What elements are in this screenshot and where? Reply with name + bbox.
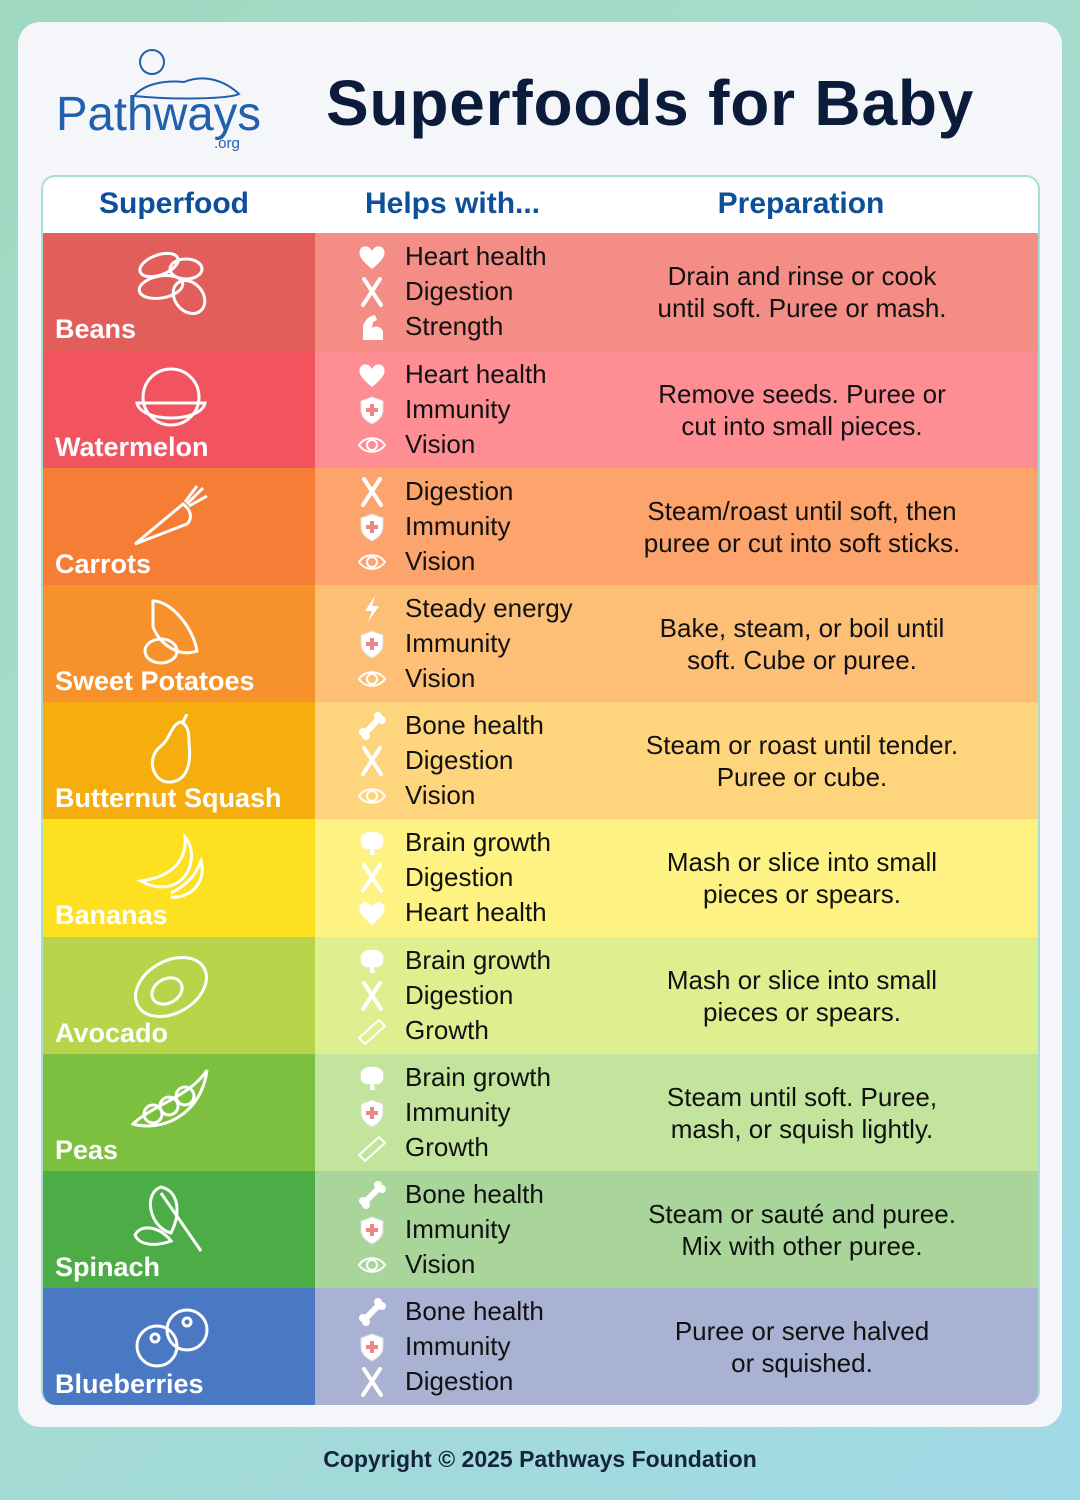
row: Beans: Strength [405,311,503,341]
row: Spinach: Steam or sauté and puree. [648,1199,956,1229]
row: Avocado: Mash or slice into small [667,965,937,995]
row: Butternut Squash: Puree or cube. [717,762,887,792]
header row [99,187,884,220]
row: Beans: until soft. Puree or mash. [657,293,947,323]
row: Peas: Brain growth [405,1062,551,1092]
row: Blueberries: Bone health [405,1296,544,1326]
logo: Pathways.org: Pathways [56,88,261,141]
row: Spinach: Mix with other puree. [681,1231,923,1261]
row: Sweet Potatoes: Immunity [405,628,510,658]
row: Butternut Squash: Butternut Squash [55,783,282,813]
row: Sweet Potatoes [43,585,1038,702]
row: Watermelon: Heart health [405,359,547,389]
row: Avocado: Avocado [55,1018,168,1048]
row: Watermelon: cut into small pieces. [681,411,923,441]
row: Spinach: Spinach [55,1252,160,1282]
row: Blueberries [43,1288,1038,1405]
header row: Helps with... [365,187,540,220]
row: Watermelon: Vision [405,429,475,459]
row: Blueberries: Immunity [405,1331,510,1361]
logo: Pathways.org: .org [214,135,240,152]
logo: Pathways.org [56,49,261,152]
row: Beans: Drain and rinse or cook [668,261,936,291]
row: Watermelon: Watermelon [55,432,209,462]
row: Bananas [43,819,1038,937]
row: Blueberries: Blueberries [55,1369,204,1399]
row: Watermelon: Immunity [405,394,510,424]
row: Avocado [43,937,1038,1054]
row: Bananas: Brain growth [405,827,551,857]
row: Beans: Digestion [405,276,513,306]
footer copyright: Copyright © 2025 Pathways Foundation [323,1446,757,1472]
row: Watermelon [43,351,1038,468]
row: Beans [43,233,1038,351]
row: Peas: Peas [55,1135,118,1165]
row: Bananas: Mash or slice into small [667,847,937,877]
row: Spinach: Immunity [405,1214,510,1244]
row: Sweet Potatoes: soft. Cube or puree. [687,645,917,675]
row: Peas: mash, or squish lightly. [671,1114,933,1144]
row: Avocado: pieces or spears. [703,997,901,1027]
row: Butternut Squash: Bone health [405,710,544,740]
row: Watermelon: Remove seeds. Puree or [658,379,946,409]
row: Butternut Squash: Digestion [405,745,513,775]
row: Carrots: Steam/roast until soft, then [647,496,957,526]
row: Spinach: Vision [405,1249,475,1279]
row: Beans: Beans [55,314,136,344]
row: Blueberries: Puree or serve halved [675,1316,929,1346]
row: Peas: Steam until soft. Puree, [667,1082,937,1112]
row: Peas [43,1054,1038,1171]
header row: Preparation [718,187,884,220]
row: Avocado: Growth [405,1015,489,1045]
row: Blueberries: Digestion [405,1366,513,1396]
row: Butternut Squash: Steam or roast until tender. [646,730,958,760]
row: Sweet Potatoes: Bake, steam, or boil until [660,613,944,643]
row: Carrots: puree or cut into soft sticks. [644,528,960,558]
row: Avocado: Brain growth [405,945,551,975]
row: Carrots: Carrots [55,549,151,579]
row: Peas: Growth [405,1132,489,1162]
row: Sweet Potatoes: Vision [405,663,475,693]
row: Beans: Heart health [405,241,547,271]
table [41,175,1040,1405]
row: Carrots: Immunity [405,511,510,541]
row: Carrots: Vision [405,546,475,576]
row: Bananas: Heart health [405,897,547,927]
row: Spinach [43,1171,1038,1288]
header row: Superfood [99,187,249,220]
row: Carrots: Digestion [405,476,513,506]
row: Bananas: pieces or spears. [703,879,901,909]
row: Blueberries: or squished. [731,1348,873,1378]
row: Peas: Immunity [405,1097,510,1127]
title: Superfoods for Baby [326,67,974,139]
row: Butternut Squash [43,702,1038,819]
row: Sweet Potatoes: Steady energy [405,593,573,623]
row: Avocado: Digestion [405,980,513,1010]
row: Bananas: Bananas [55,900,168,930]
row: Sweet Potatoes: Sweet Potatoes [55,666,255,696]
row: Bananas: Digestion [405,862,513,892]
row: Butternut Squash: Vision [405,780,475,810]
row: Carrots [43,468,1038,585]
row: Spinach: Bone health [405,1179,544,1209]
